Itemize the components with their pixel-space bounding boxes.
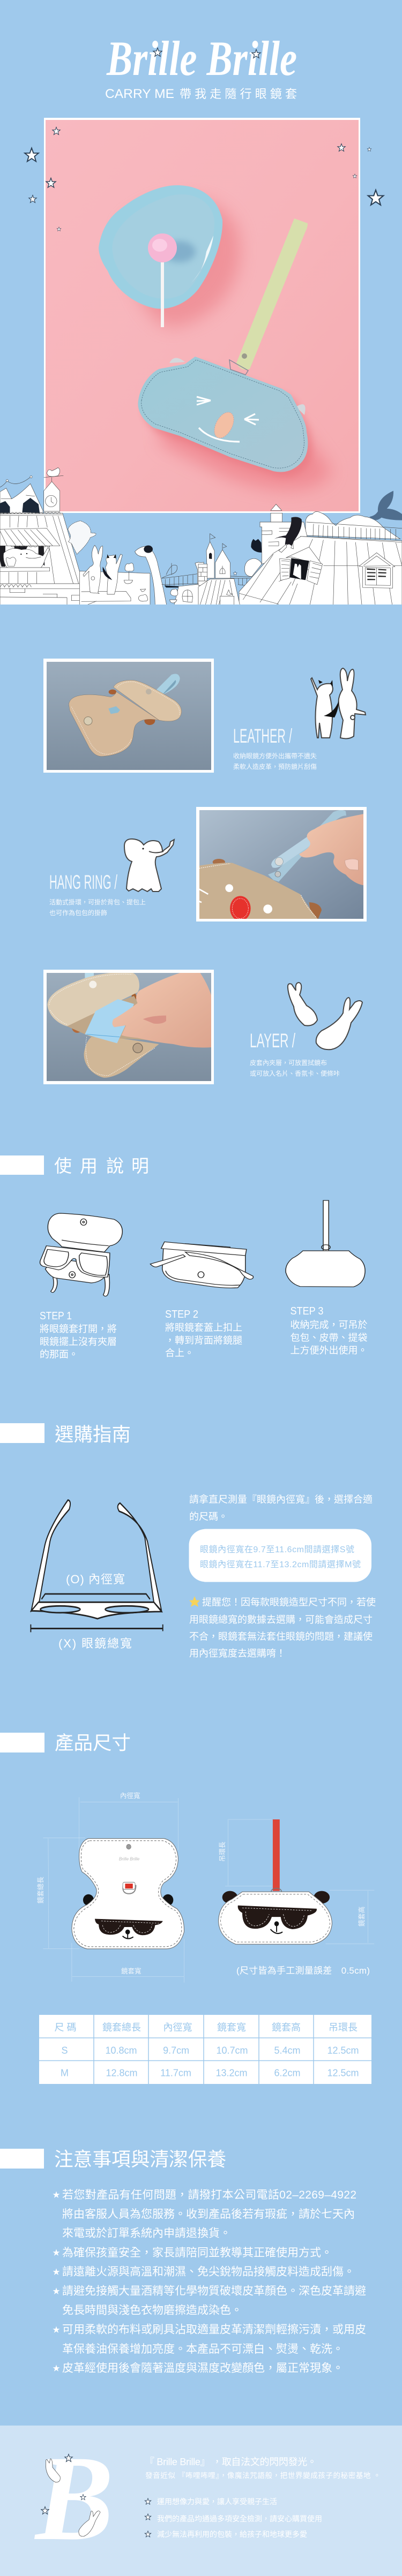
section header: guide: 選購指南 [55,1424,131,1445]
table: size chart: 10.8cm [105,2045,137,2056]
section header: usage: 使 [54,1156,72,1176]
table: size chart: 12.8cm [106,2068,138,2079]
note: tolerance: (尺寸皆為手工測量誤差 0.5cm) [236,1966,370,1976]
label: case width dim: 鏡套寬 [121,1967,142,1975]
text: layer description: 皮套內夾層，可放置拭鏡布 [250,1059,327,1067]
text: step 3: STEP 3 [291,1305,324,1317]
text: brand intro [145,2457,381,2480]
table: size chart: 10.7cm [216,2045,248,2056]
panel: features [43,659,367,1084]
list: care notes: 皮革經使用後會隨著溫度與濕度改變顏色，屬正常現象。 [62,2362,344,2374]
list: care notes: 革保養油保養增加亮度。本產品不可漂白、熨燙、乾洗。 [62,2343,344,2355]
label: case height dim: 鏡套高 [358,1906,366,1927]
label: ring length dim: 吊環長 [219,1841,226,1862]
section header: care: 注意事項與清潔保養 [54,2149,226,2170]
panel: instructions [0,1155,368,1360]
text: reminder: 不合，眼鏡套無法套住眼鏡的問題，建議使 [189,1631,373,1642]
text: step 2: 將眼鏡套蓋上扣上 [165,1323,242,1333]
list: care notes: ★ [53,2190,60,2199]
text: hang ring description: 也可作為包包的掛飾 [49,909,107,917]
table: size chart: 6.2cm [274,2068,301,2079]
section header: usage [0,1155,149,1176]
callout: size selection [189,1529,371,1582]
callout: size selection: 眼鏡內徑寬在11.7至13.2cm間請選擇M號 [200,1559,361,1569]
list: care notes: 可用柔軟的布料或刷具沾取適量皮革清潔劑輕擦污漬，或用皮 [62,2324,366,2336]
section header: usage: 說 [106,1156,124,1176]
callout: size selection: 眼鏡內徑寬在9.7至11.6cm間請選擇S號 [200,1544,354,1554]
illustration: rabbits [288,983,362,1049]
text: layer description [250,1059,340,1077]
logo: script B with rabbits: B [34,2431,114,2566]
text: step 1 [40,1310,117,1360]
panel: care notes [0,2149,366,2374]
subtitle: CARRY ME [105,87,174,101]
list: brand promises [145,2497,322,2539]
table: size chart: 12.5cm [327,2045,359,2056]
town base edge [0,605,402,610]
text: step 3: 收納完成，可吊於 [291,1319,368,1330]
text: step 2: ，轉到背面將鏡腿 [165,1335,242,1346]
text: reminder: 提醒您！因每款眼鏡造型尺寸不同，若使 [202,1597,376,1607]
panel: hero [0,31,402,610]
list: care notes: ★ [53,2268,60,2276]
panel: buying guide [0,1423,376,1659]
list: care notes: 為確保孩童安全，家長請陪同並教導其正確使用方式。 [62,2247,332,2259]
list: care notes: ★ [53,2287,60,2295]
table: size chart: M [61,2068,69,2079]
text: measuring instruction: 請拿直尺測量『眼鏡內徑寬』後，選擇合適 [189,1494,373,1505]
table: size chart: 13.2cm [215,2068,248,2079]
table: size chart: 9.7cm [163,2045,189,2056]
label: length dim: 鏡套總長 [36,1876,44,1903]
text: brand intro: 『 Brille Brille』 ，取自法文的閃閃發光。 [145,2457,317,2467]
text: step 3 [291,1305,368,1356]
section header: size: 產品尺寸 [55,1732,131,1754]
illustration: left town [0,467,204,605]
table: size chart: 鏡套高 [272,2022,301,2033]
section header: size [0,1732,131,1754]
list: care notes: ★ [53,2248,60,2257]
text: step 2: STEP 2 [165,1309,198,1320]
diagram: closed case with dimensions [219,1819,374,1944]
text: reminder: 用眼鏡總寬的數據去選購，可能會造成尺寸 [189,1614,373,1625]
text: hang ring description: 活動式掛環，可掛於背包、提包上 [49,898,146,906]
label: total width: (X) 眼鏡總寬 [58,1637,132,1650]
table: size chart: 尺 碼 [54,2022,77,2033]
list: brand promises: 減少無法再利用的包裝，給孩子和地球更多愛 [157,2530,307,2539]
photo: cloth in case [43,970,214,1084]
table: size chart: 吊環長 [329,2022,358,2033]
panel: product size [0,1732,374,2084]
brand logo title: Brille Brille [106,31,297,86]
subtitle: 帶我走隨行眼鏡套 [180,87,297,101]
text: layer description: 或可放入名片、香氛卡、便條咔 [250,1069,340,1077]
heading: hang ring: HANG RING / [49,871,117,893]
table: size chart: 5.4cm [274,2045,301,2056]
list: care notes: 請避免接觸大量酒精等化學物質破壞皮革顏色。深色皮革請避 [62,2285,366,2297]
glasses case [138,353,312,477]
text: hang ring description [49,898,146,917]
table: size chart [39,2015,371,2084]
photo: open case [43,659,214,773]
list: care notes: ★ [53,2325,60,2334]
text: measuring instruction: 的尺碼。 [189,1511,228,1522]
list: care notes: ★ [53,2364,60,2373]
label: inner width dim: 內徑寬 [120,1792,140,1800]
diagram: glasses measurement [31,1500,163,1632]
text: step 1: 眼鏡擺上沒有夾層 [40,1336,117,1347]
table: size chart: 內徑寬 [163,2022,192,2033]
section header: guide [0,1423,131,1445]
stars around the photo [25,127,383,231]
icon: step 3 drawing [286,1200,365,1287]
product photo on pink [44,118,360,513]
table: size chart: 11.7cm [160,2068,191,2079]
table: size chart: 鏡套寬 [217,2022,246,2033]
list: brand promises: 我們的產品均通過多項安全檢測，請安心購買使用 [157,2514,322,2523]
text: step 2 [165,1309,242,1358]
section header: usage: 用 [80,1156,98,1176]
text: leather description: 柔軟人造皮革，預防鏡片刮傷 [233,762,317,770]
list: care notes: 將由客服人員為您服務。收到產品後若有瑕疵，請於七天內 [62,2208,355,2220]
text: leather description: 收納眼鏡方便外出攜帶不遺失 [233,752,317,760]
list: brand promises: 運用想像力與愛，讓人享受親子生活 [157,2497,277,2506]
footer background [0,2426,402,2576]
label: inner width: (O) 內徑寬 [66,1573,125,1586]
icon: step 1 drawing [40,1213,122,1296]
text: step 1: 的那面。 [40,1349,78,1360]
text: step 1: 將眼鏡套打開，將 [40,1324,117,1334]
text: step 2: 合上。 [165,1348,194,1358]
heading: layer: LAYER / [250,1030,295,1052]
list: care notes: 若您對產品有任何問題，請撥打本公司電話02–2269–4922 [62,2189,356,2201]
table: size chart: 鏡套總長 [102,2022,141,2033]
plate [99,185,222,309]
text: reminder [189,1597,376,1659]
heading: leather: LEATHER / [233,725,292,747]
list: care notes: 來電或於訂單系統內申請退換貨。 [62,2227,231,2239]
list: care notes: 請遠離火源與高溫和潮濕、免尖銳物品接觸皮料造成刮傷。 [62,2266,355,2278]
icon: yellow star [189,1596,200,1607]
lollipop [148,233,177,327]
text: step 3: 包包、皮帶、提袋 [291,1332,368,1343]
text: step 1: STEP 1 [40,1310,72,1322]
subtitle [105,87,297,101]
diagram: open case with dimensions [43,1797,184,1983]
photo: hand with strap [196,807,367,921]
list: care notes [53,2189,366,2374]
illustration: elephant [124,839,174,892]
table: size chart: 12.5cm [327,2068,359,2079]
text: reminder: 用內徑寬度去選購唷！ [189,1648,286,1659]
text: measuring instruction [189,1494,373,1522]
illustration: right town [198,491,402,605]
illustration: cat and rabbit [311,668,366,738]
list: care notes: 免長時間與淺色衣物磨擦造成染色。 [62,2305,242,2316]
strap [236,218,308,370]
section header: usage: 明 [131,1156,149,1176]
icon: step 2 drawing [150,1242,253,1288]
text: brand intro: 發音近似 『咘哩咘哩』，像魔法咒語般，把世界變成孩子的秘密基地 。 [145,2471,381,2480]
diagram: open case with dimensions: Brille Brille [119,1856,140,1862]
text: step 3: 上方便外出使用。 [291,1345,368,1356]
table: size chart: S [61,2045,68,2056]
panel: footer [0,2426,402,2576]
text: leather description [233,752,317,770]
